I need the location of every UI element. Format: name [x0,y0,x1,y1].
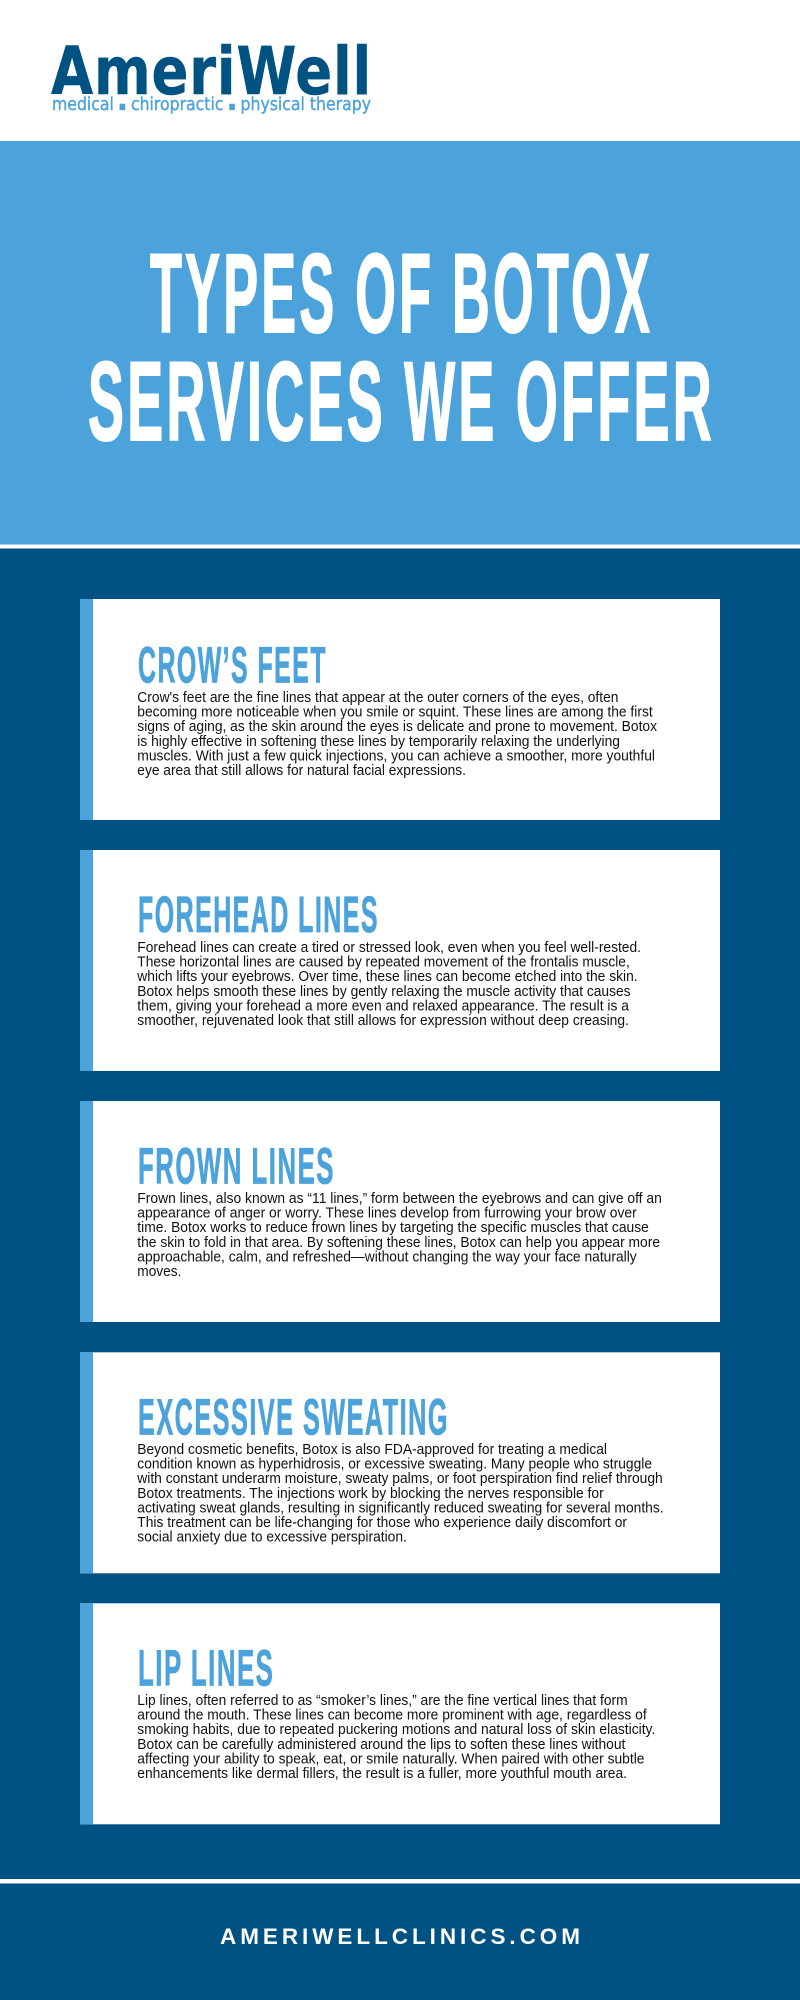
text block: excessive sweating: Botox treatments. The injections work by blocking the nerves responsible for [137,1486,604,1502]
text block: crow's feet: signs of aging, as the skin around the eyes is delicate and prone to movement. Botox [137,719,658,735]
text block: frown lines: approachable, calm, and refreshed—without changing the way your face naturally [137,1249,637,1265]
logo wordmark: AmeriWell [51,33,372,110]
text block: excessive sweating: activating sweat glands, resulting in significantly reduced sweating for several months. [137,1500,664,1516]
text block: frown lines: Frown lines, also known as “11 lines,” form between the eyebrows and can give off an [137,1191,662,1207]
header band with logo [0,0,800,141]
text block: lip lines [137,1693,655,1782]
text block: forehead lines: which lifts your eyebrows. Over time, these lines can become etched into the skin. [136,969,638,985]
text block: frown lines: moves. [137,1264,181,1280]
panel: forehead lines: FOREHEAD LINES [138,886,379,943]
panel: frown lines [80,1101,720,1322]
text block: forehead lines: Botox helps smooth these lines by gently relaxing the muscle activity that causes [137,984,631,1000]
text block: lip lines: Botox can be carefully administered around the lips to soften these lines without [137,1737,625,1753]
text block: crow's feet: Crow's feet are the fine lines that appear at the outer corners of the eyes, often [137,690,619,706]
footer website: AMERIWELLCLINICS.COM [220,1924,580,1949]
heading: frown lines: FROWN LINES [138,1138,335,1195]
text block: forehead lines [136,940,641,1029]
text block: frown lines [137,1191,662,1280]
text block: excessive sweating [136,1442,664,1546]
text block: lip lines: affecting your ability to speak, eat, or smile naturally. When paired with other subtle [137,1751,645,1767]
text block: lip lines: smoking habits, due to repeated puckering motions and natural loss of skin elasticity. [137,1722,655,1738]
panel: excessive sweating [80,1352,720,1573]
text block: forehead lines: These horizontal lines are caused by repeated movement of the frontalis muscle, [137,955,630,971]
text block: lip lines: around the mouth. These lines can become more prominent with age, regardless of [137,1708,648,1724]
panel: lip lines [80,1603,720,1824]
text block: crow's feet: muscles. With just a few quick injections, you can achieve a smoother, more youthful [137,748,655,764]
text block: frown lines: appearance of anger or worry. These lines develop from furrowing your brow over [137,1206,637,1222]
panel: crow's feet [80,599,720,820]
text block: crow's feet: is highly effective in softening these lines by temporarily relaxing the underlying [137,734,620,750]
title banner [0,141,800,544]
text block: excessive sweating: with constant underarm moisture, sweaty palms, or foot perspiration find relief through [136,1471,663,1487]
text block: excessive sweating: Beyond cosmetic benefits, Botox is also FDA-approved for treating a medical [137,1442,607,1458]
text block: lip lines: enhancements like dermal fillers, the result is a fuller, more youthful mouth area. [137,1766,627,1782]
text block: frown lines: the skin to fold in that area. By softening these lines, Botox can help you appear more [137,1235,660,1251]
panel: excessive sweating: EXCESSIVE SWEATING [138,1389,449,1446]
panel: forehead lines [80,850,720,1071]
text block: crow's feet: becoming more noticeable when you smile or squint. These lines are among the first [137,705,653,721]
text block: forehead lines: smoother, rejuvenated look that still allows for expression without deep creasing. [137,1013,629,1029]
text block: frown lines: time. Botox works to reduce frown lines by targeting the specific muscles that cause [137,1220,649,1236]
text block: excessive sweating: condition known as hyperhidrosis, or excessive sweating. Many people who struggle [137,1457,652,1473]
text block: excessive sweating: social anxiety due to excessive perspiration. [137,1530,407,1546]
text block: forehead lines: Forehead lines can create a tired or stressed look, even when you feel well-rested. [137,940,641,956]
heading: lip lines: LIP LINES [138,1640,274,1697]
panel: crow's feet: CROW’S FEET [138,637,327,694]
text block: excessive sweating: This treatment can be life-changing for those who experience daily discomfort or [137,1515,627,1531]
text block: crow's feet [137,690,658,779]
footer band [0,1884,800,2000]
text block: lip lines: Lip lines, often referred to as “smoker’s lines,” are the fine vertical lines that form [137,1693,628,1709]
text block: crow's feet: eye area that still allows for natural facial expressions. [137,763,466,779]
logo tagline: medical ▪ chiropractic ▪ physical therapy [52,94,371,115]
text block: forehead lines: them, giving your forehead a more even and relaxed appearance. The result is a [137,998,630,1014]
